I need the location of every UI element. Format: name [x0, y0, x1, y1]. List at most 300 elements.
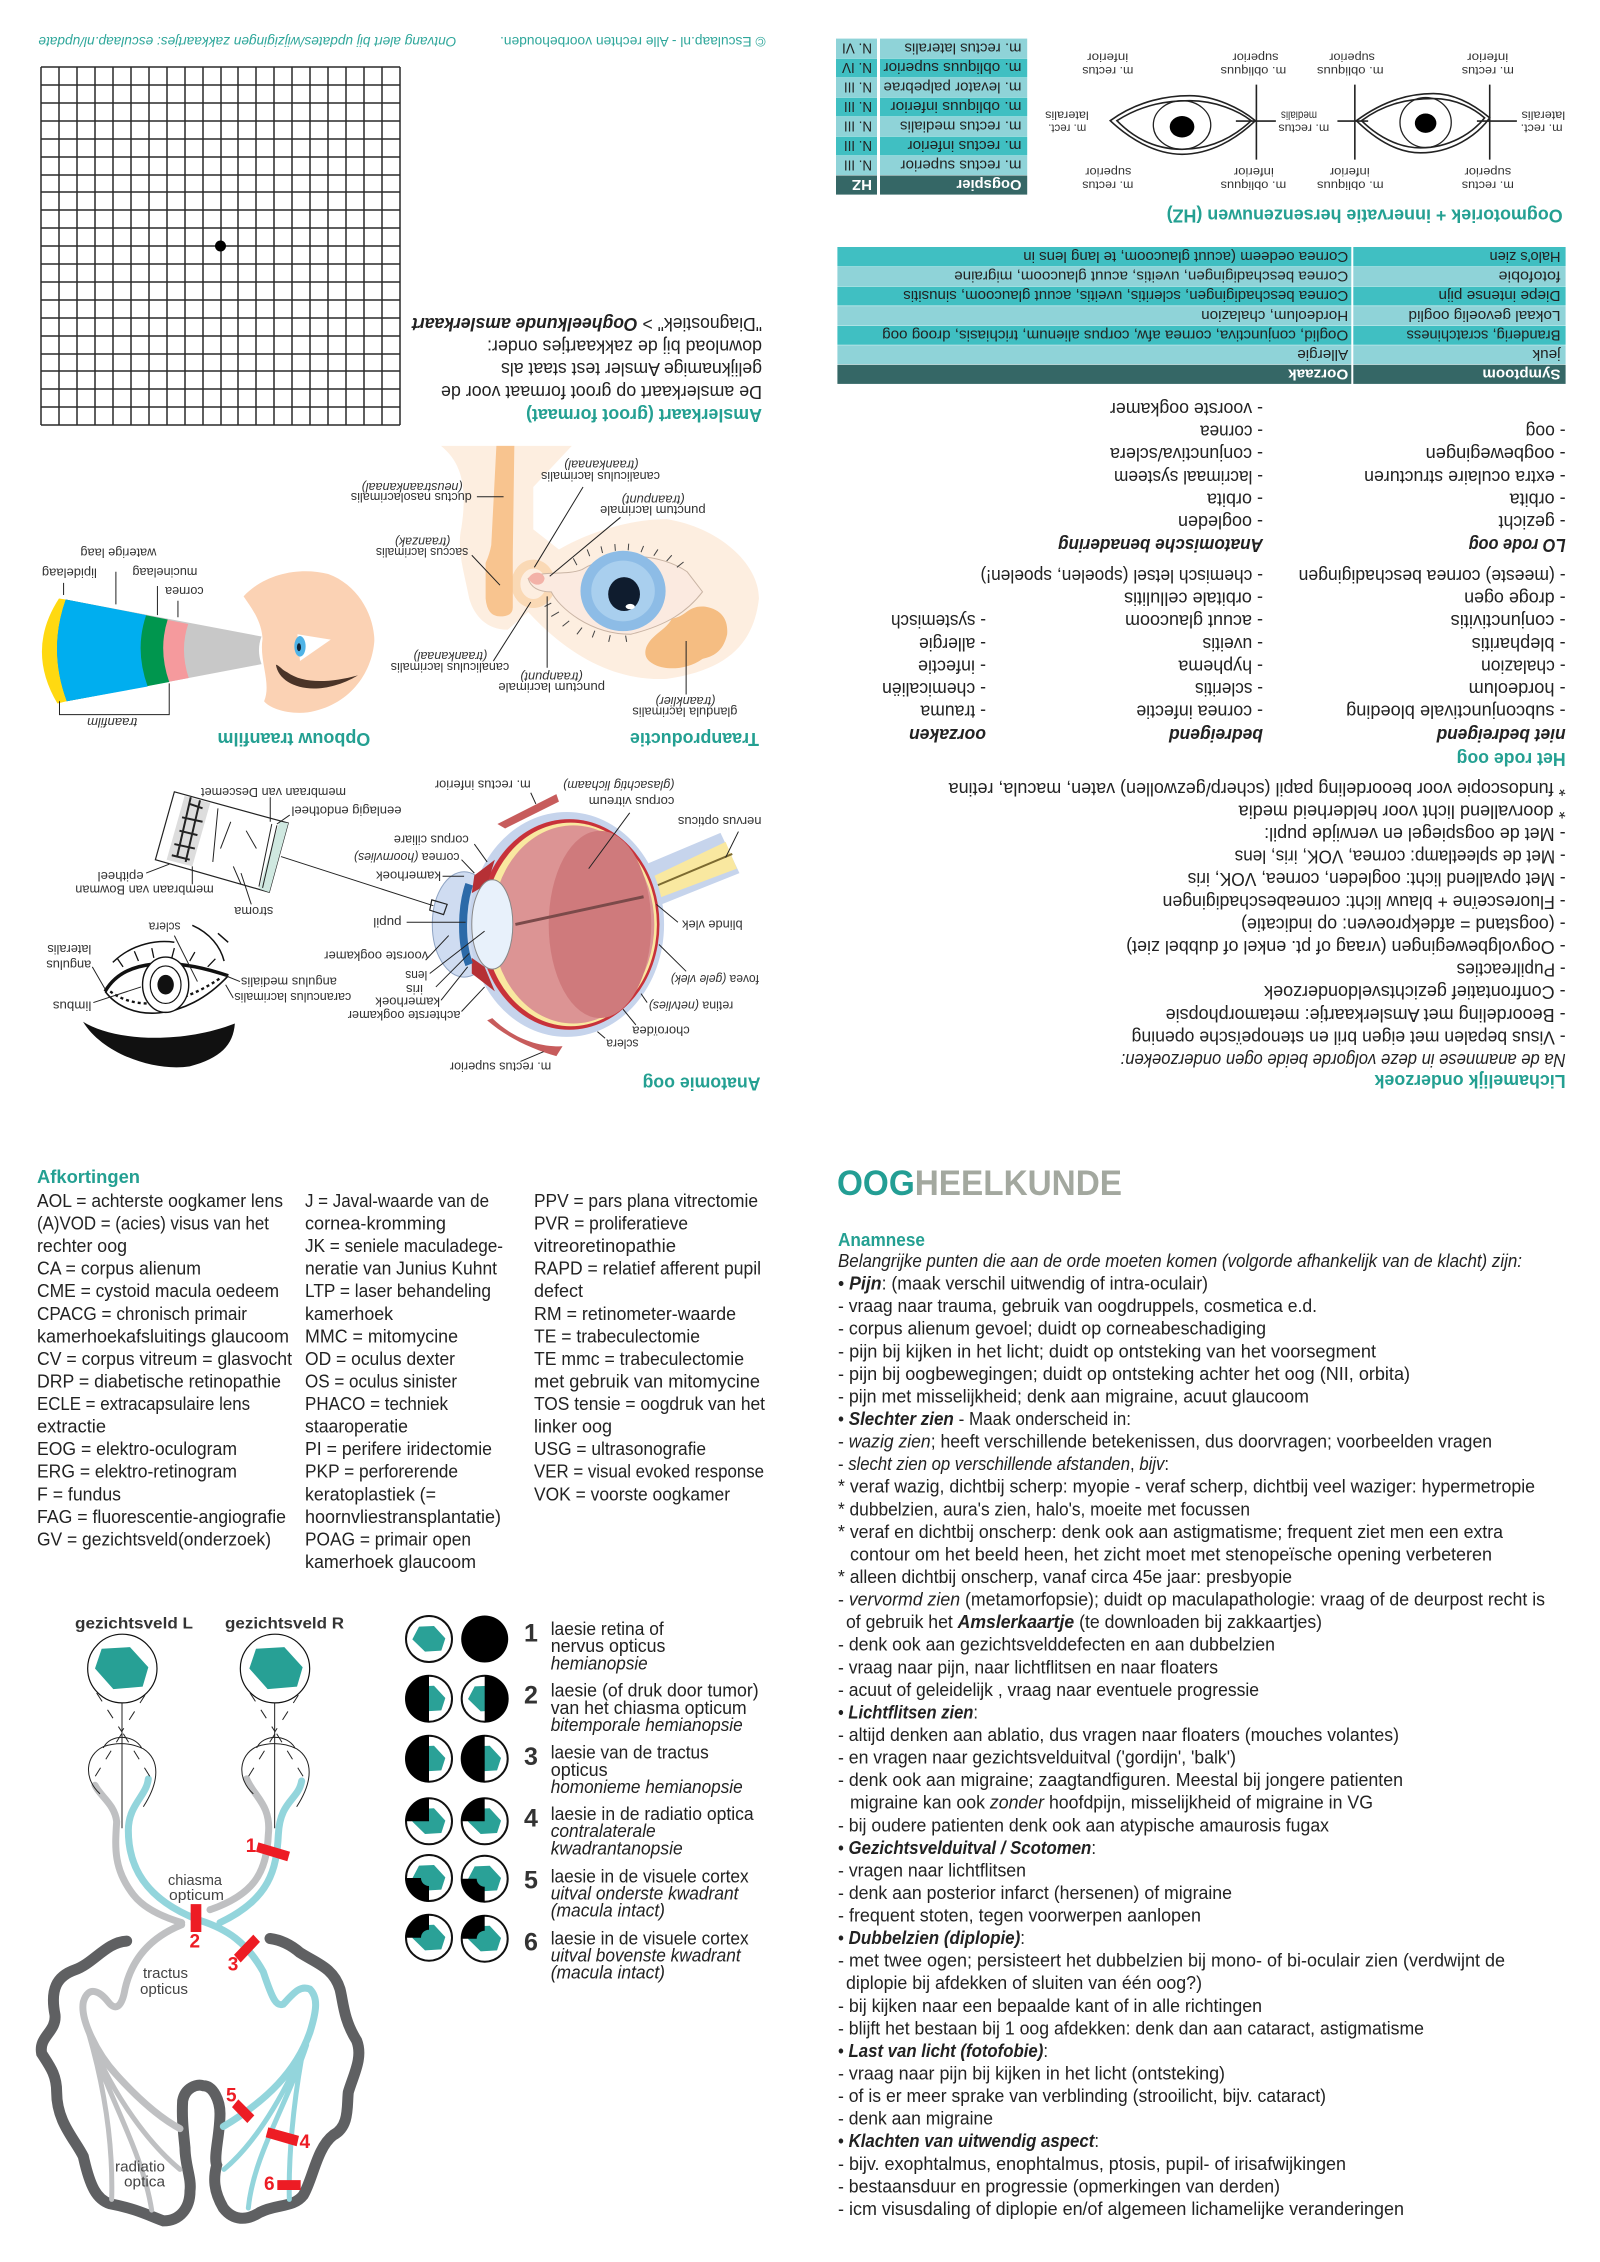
table: oogspier / HZ: HZ: [852, 176, 872, 193]
row 6: 6: [524, 1929, 538, 1957]
abbreviations column 2: neratie van Junius Kuhnt: [305, 1259, 497, 1279]
table: symptoom / oorzaak: Branderig, scratchiness: [1406, 326, 1560, 343]
abbreviations column 1: GV = gezichtsveld(onderzoek): [37, 1529, 271, 1549]
abbreviations column 3: vitreoretinopathie: [534, 1236, 676, 1256]
examination list: - Beoordeling met Amslerkaartje: metamorphopsie: [1166, 1005, 1566, 1025]
tear duct labels: (neustraankanaal): [362, 480, 463, 495]
examination list: - (oogstand = afdekproeven: op indicatie): [1241, 914, 1566, 934]
anamnese text: * alleen dichtbij onscherp, vanaf circa 45e jaar: presbyopie: [838, 1567, 1292, 1587]
list: bedreigend: - orbitale cellulitis: [1124, 589, 1263, 609]
row 1: hemianopsie: [551, 1653, 648, 1673]
eyeball labels: fovea (gele vlek): [671, 972, 759, 987]
abbreviations column 2: OD = oculus dexter: [305, 1349, 455, 1369]
abbreviations column 1: rechter oog: [37, 1236, 127, 1256]
abbreviations column 2: PHACO = techniek: [305, 1394, 449, 1414]
eye sketch illustration: [83, 925, 240, 1067]
heading: Anatomie oog: Anatomie oog: [642, 1074, 760, 1094]
list: niet bedreigend: - blepharitis: [1472, 634, 1566, 654]
eye sketch labels: caranculus lacrimalis: [234, 990, 351, 1005]
eye muscle labels: superior: [1329, 51, 1375, 65]
tear duct labels: (traankanaal): [413, 649, 487, 664]
abbreviations column 1: FAG = fluorescentie-angiografie: [37, 1507, 286, 1527]
list: Anatomische benadering: [1058, 399, 1264, 555]
eye muscle labels: m. rect.: [1521, 121, 1563, 135]
eye sketch labels: limbus: [52, 998, 91, 1013]
row 4: kwadrantanopsie: [551, 1838, 683, 1858]
visual pathway drawing: [41, 1634, 359, 2221]
table: oogspier / HZ: m. rectus inferior: [908, 137, 1022, 154]
physical examination: [948, 779, 1566, 1092]
anamnese text: - vervormd zien (metamorfopsie); duidt op maculapathologie: vraag of de deurpost recht is: [838, 1590, 1545, 1610]
anamnese text: - slecht zien op verschillende afstanden, bijv:: [838, 1454, 1169, 1474]
heading: Oogmotoriek + innervatie hersenzenuwen: Oogmotoriek + innervatie hersenzenuwen (HZ): [1167, 206, 1563, 227]
anamnese text: - vraag naar trauma, gebruik van oogdruppels, cosmetica e.d.: [838, 1296, 1317, 1316]
examination list: * fundoscopie voor beoordeling papil (scherp/gezwollen) vaten, macula, retina: [948, 779, 1566, 799]
amsler description: gelijknamige Amsler test staat als: [501, 359, 762, 379]
abbreviations column 3: USG = ultrasonografie: [534, 1439, 706, 1459]
list: Anatomische benadering: - cornea: [1199, 422, 1263, 442]
row 2: 2: [524, 1682, 538, 1710]
tear duct labels: (traanpunt): [622, 492, 685, 508]
list: niet bedreigend: - conjunctivitis: [1451, 611, 1566, 631]
anamnese text: Belangrijke punten die aan de orde moeten komen (volgorde afhankelijk van de klacht) zijn:: [838, 1251, 1522, 1271]
table: oogspier / HZ: m. rectus lateralis: [904, 40, 1022, 57]
lesion site numbers: 2: [190, 1932, 200, 1952]
table: oogspier / HZ: m. rectus medialis: [900, 118, 1022, 135]
lesion site numbers: 3: [228, 1955, 238, 1976]
label: radiatio optica: optica: [124, 2174, 166, 2191]
anamnese text: - pijn met misselijkheid; denk aan migraine, acuut glaucoom: [838, 1386, 1309, 1406]
examination list: * doorvallend licht voor helderheid media: [1238, 801, 1566, 821]
table: symptoom / oorzaak: Symptoom: [1482, 366, 1560, 382]
tear duct labels: glandula lacrimalis: [632, 704, 737, 720]
abbreviations column 2: J = Javal-waarde van de: [305, 1191, 489, 1211]
amsler heading: Amslerkaart (groot formaat): [526, 405, 762, 426]
cornea section labels: membraan van Descemet: [201, 785, 346, 800]
abbreviations column 1: ECLE = extracapsulaire lens: [37, 1394, 250, 1414]
eyeball labels: blinde vlek: [682, 918, 743, 932]
abbreviations column 1: CA = corpus alienum: [37, 1259, 201, 1279]
list: bedreigend: - hyphema: [1177, 656, 1263, 676]
eyeball labels: iris: [405, 982, 423, 997]
amsler text block: [411, 314, 762, 426]
tear duct labels: (traankanaal): [564, 458, 638, 473]
heading: gezichtsveld L: gezichtsveld L: [75, 1616, 193, 1633]
panel: top half shapes (amsler grid): [41, 67, 1517, 1067]
abbreviations column 3: TOS tensie = oogdruk van het: [534, 1394, 765, 1414]
eye sketch labels: sclera: [148, 920, 180, 935]
eyeball labels: sclera: [605, 1037, 638, 1052]
row 3: opticus: [551, 1760, 608, 1780]
abbreviations column 2: [305, 1191, 503, 1572]
anamnese text: - en vragen naar gezichtsvelduitval ('gordijn', 'balk'): [838, 1748, 1236, 1768]
table: symptoom / oorzaak: Hordeolum, chalazion: [1201, 307, 1348, 324]
row 6: (macula intact): [551, 1963, 665, 1983]
anamnese text: - bij oudere patienten denk ook aan atypische amaurosis fugax: [838, 1815, 1329, 1835]
anamnese text: - vraag naar pijn bij kijken in het licht (ontsteking): [838, 2064, 1225, 2084]
abbreviations column 2: keratoplastiek (=: [305, 1484, 436, 1504]
list: oorzaken: - systemisch: [891, 611, 986, 631]
row 4: [405, 1798, 755, 1858]
anamnese text: * veraf wazig, dichtbij scherp: myopie - veraf scherp, dichtbij veel waziger: hypermetropie: [838, 1477, 1535, 1497]
tear duct labels: canaliculus lacrimalis: [390, 660, 509, 675]
eye sketch labels: angulus medialis: [240, 975, 337, 990]
abbreviations column 2: cornea-kromming: [305, 1214, 446, 1234]
list: LO rode oog: - oog: [1526, 422, 1566, 442]
anamnese text: - pijn bij kijken in het licht; duidt op ontsteking van het voorsegment: [838, 1341, 1376, 1361]
eye muscle labels: m. rectus: [1462, 64, 1514, 78]
row 4: 4: [524, 1805, 538, 1833]
table: oogspier / HZ: N. VI: [842, 40, 872, 57]
cornea section labels: membraan van Bowman: [75, 883, 214, 898]
tear duct labels: ductus nasolacrimalis: [350, 490, 472, 505]
anamnese text: - denk ook aan gezichtsvelddefecten en aan dubbelzien: [838, 1635, 1275, 1655]
eye muscle labels: superior: [1085, 165, 1131, 179]
list: Anatomische benadering: - voorste oogkamer: [1110, 399, 1263, 419]
abbreviations column 1: (A)VOD = (acies) visus van het: [37, 1214, 269, 1234]
label: radiatio optica: radiatio: [115, 2158, 165, 2176]
table: symptoom / oorzaak: Cornea beschadigingen, scleritis, uveitis, acuut glaucoom, sinusitis: [903, 287, 1348, 304]
table: symptoom / oorzaak: Cornea beschadigingen, uveitis, acuut glaucoom, migraine: [954, 268, 1348, 285]
eye muscle labels: lateralis: [1522, 108, 1565, 122]
list: Anatomische benadering: - conjunctiva/sclera: [1109, 444, 1263, 464]
eye muscle labels: inferior: [1467, 51, 1508, 65]
row 6: uitval bovenste kwadrant: [551, 1946, 742, 1966]
lesion site numbers: 1: [246, 1836, 257, 1857]
tear duct labels: punctum lacrimale: [498, 680, 605, 695]
tear production illustration: [441, 446, 759, 695]
table: symptoom / oorzaak: Oorzaak: [1288, 366, 1348, 382]
amsler grid: [41, 67, 400, 425]
lesion site numbers: [190, 1836, 310, 2195]
abbreviations column 2: hoornvliestransplantatie): [305, 1507, 501, 1527]
list: bedreigend: - cornea infectie: [1136, 702, 1263, 722]
label: tractus opticus: [140, 1965, 188, 1998]
table: oogspier / HZ: N. III: [844, 157, 872, 174]
abbreviations column 2: JK = seniele maculadege-: [305, 1236, 503, 1256]
abbreviations column 3: linker oog: [534, 1417, 612, 1437]
panel: visual pathway diagram: [41, 1616, 359, 2221]
anamnese text: • Last van licht (fotofobie):: [838, 2041, 1048, 2061]
eyeball labels: nervus opticus: [677, 814, 762, 829]
label: tractus opticus: opticus: [140, 1981, 188, 1998]
heading: Afkortingen: Afkortingen: [37, 1166, 140, 1187]
list: bedreigend: - uveitis: [1202, 634, 1263, 654]
eye diagrams (oogmotoriek): [1110, 85, 1517, 160]
anamnese text: - acuut of geleidelijk , vraag naar eventuele progressie: [838, 1680, 1259, 1700]
list: oorzaken: [882, 611, 986, 745]
row 1: nervus opticus: [551, 1636, 665, 1656]
amsler description: De amslerkaart op groot formaat voor de: [441, 382, 762, 402]
table: symptoom / oorzaak: jeuk: [1532, 346, 1562, 363]
list: LO rode oog: LO rode oog: [1469, 535, 1566, 555]
footer update link: Ontvang alert bij updates/wijzigingen zakkaartjes: esculaap.nl/update: [38, 34, 456, 50]
table: oogspier / HZ: Oogspier: [956, 176, 1022, 193]
abbreviations column 3: TE mmc = trabeculectomie: [534, 1349, 744, 1369]
eye muscle labels: inferior: [1234, 165, 1274, 179]
table: oogspier / HZ: m. obliquus inferior: [890, 98, 1022, 115]
abbreviations column 1: extractie: [37, 1417, 106, 1437]
tear duct labels: punctum lacrimale: [600, 503, 706, 518]
cornea section labels: epitheel: [97, 869, 144, 884]
anamnese text: - vragen naar lichtflitsen: [838, 1860, 1026, 1880]
eye muscle labels: m. rectus: [1082, 178, 1133, 192]
eye muscle labels: m. obliquus: [1221, 178, 1286, 192]
heading: gezichtsveld R: gezichtsveld R: [225, 1616, 344, 1633]
anamnese text: - bij kijken naar een bepaalde kant of in alle richtingen: [838, 1996, 1262, 2016]
row 1: laesie retina of: [551, 1619, 665, 1639]
abbreviations column 1: DRP = diabetische retinopathie: [37, 1372, 281, 1392]
list: LO rode oog: - gezicht: [1499, 512, 1566, 532]
table: oogspier / HZ: m. levator palpebrae: [884, 79, 1022, 96]
table: symptoom / oorzaak: Halo's zien: [1490, 248, 1560, 265]
list: bedreigend: - acuut glaucoom: [1125, 611, 1263, 631]
eyeball labels: m. rectus superior: [449, 1059, 551, 1074]
list: bedreigend: - scleritis: [1195, 679, 1263, 699]
eye muscle labels: m. obliquus: [1317, 178, 1384, 192]
abbreviations column 2: kamerhoek: [305, 1304, 394, 1324]
amsler description: [411, 314, 762, 402]
anamnese text: - wazig zien; heeft verschillende betekenissen, dus doorvragen; voorbeelden vragen: [838, 1432, 1492, 1452]
abbreviations column 3: TE = trabeculectomie: [534, 1326, 700, 1346]
list: Anatomische benadering: Anatomische benadering: [1058, 535, 1264, 555]
cornea section labels: eenlagig endotheel: [291, 804, 402, 819]
amsler description: download bij de zakkaartjes onder:: [487, 336, 762, 356]
list: oorzaken: - trauma: [919, 702, 986, 722]
eye sketch labels: [46, 920, 351, 1013]
abbreviations column 2: OS = oculus sinister: [305, 1372, 457, 1392]
anamnese text: * veraf en dichtbij onscherp: denk ook aan astigmatisme; frequent ziet men een extra: [838, 1522, 1504, 1542]
row 5: (macula intact): [551, 1901, 665, 1921]
table: symptoom / oorzaak: Allergie: [1297, 346, 1348, 363]
row 3: 3: [524, 1743, 538, 1771]
row 3: [405, 1735, 743, 1797]
examination list: [948, 779, 1566, 1070]
list: Anatomische benadering: - orbita: [1206, 489, 1263, 509]
tear film layer labels: traanfilm: [87, 715, 137, 730]
table: oogspier / HZ: N. III: [844, 98, 872, 115]
anamnese text: [838, 1251, 1545, 2219]
row 6: [405, 1914, 749, 1983]
label: radiatio optica: [115, 2158, 166, 2191]
anamnese text: • Pijn: (maak verschil uitwendig of intra-oculair): [838, 1274, 1208, 1294]
eye muscle labels: m. rectus: [1462, 178, 1514, 192]
table: oogspier / HZ: m. rectus superior: [900, 157, 1022, 174]
abbreviations column 1: AOL = achterste oogkamer lens: [37, 1191, 283, 1211]
abbreviations column 2: POAG = primair open: [305, 1529, 471, 1549]
row 4: contralaterale: [551, 1821, 656, 1841]
anamnese text: • Lichtflitsen zien:: [838, 1702, 978, 1722]
anamnese text: • Klachten van uitwendig aspect:: [838, 2131, 1099, 2151]
abbreviations column 2: PI = perifere iridectomie: [305, 1439, 492, 1459]
list: niet bedreigend: - (meeste) cornea beschadigingen: [1299, 566, 1566, 586]
eyeball labels: corpus ciliare: [394, 833, 469, 848]
eye muscle labels: m. obliquus: [1221, 64, 1286, 78]
eyeball labels: voorste oogkamer: [324, 949, 428, 964]
eyeball labels: retina (netvlies): [649, 998, 733, 1013]
row 3: homonieme hemianopsie: [551, 1777, 743, 1797]
tear duct labels: (traanklier): [655, 694, 715, 709]
list: niet bedreigend: [1299, 566, 1566, 745]
table: oogspier / HZ: N. III: [844, 118, 872, 135]
anatomy eyeball illustration: [281, 793, 739, 1061]
row 1: [406, 1616, 665, 1673]
tear duct labels: (traanzak): [395, 534, 450, 549]
anamnese text: - of is er meer sprake van verblinding (strooilicht, bijv. cataract): [838, 2086, 1326, 2106]
anamnese text: - bestaansduur en progressie (opmerkingen van derden): [838, 2176, 1280, 2196]
eye muscle labels: m. rectus: [1082, 64, 1133, 78]
row 5: uitval onderste kwadrant: [551, 1884, 739, 1904]
anamnese text: • Gezichtsvelduitval / Scotomen:: [838, 1838, 1096, 1858]
abbreviations column 1: EOG = elektro-oculogram: [37, 1439, 237, 1459]
list: bedreigend: bedreigend: [1168, 725, 1263, 745]
eyeball labels: corpus vitreum: [589, 794, 674, 809]
tear duct labels: canaliculus lacrimalis: [541, 469, 660, 484]
amsler description: "Diagnostiek" > Oogheelkunde amslerkaart: [411, 314, 762, 334]
examination list: - Met opvallend licht: oogleden, cornea, VOK, iris: [1188, 869, 1566, 889]
eye muscle labels: m. rect.: [1048, 121, 1086, 135]
table: oogspier / HZ: [836, 39, 1027, 195]
row 1: 1: [524, 1620, 538, 1648]
eyeball labels: m. rectus inferior: [434, 777, 531, 792]
cornea cross-section illustration: [146, 792, 290, 904]
abbreviations column 1: ERG = elektro-retinogram: [37, 1462, 237, 1482]
tear duct labels: (traanpunt): [520, 670, 583, 685]
label: chiasma opticum: [168, 1872, 224, 1904]
table: oogspier / HZ: m. obliquus superior: [884, 59, 1022, 76]
examination list: - Confrontatief gezichtsveldonderzoek: [1263, 982, 1566, 1002]
anamnese text: • Slechter zien - Maak onderscheid in:: [838, 1409, 1131, 1429]
examination list: Na de anamnese in deze volgorde beide ogen onderzoeken:: [1121, 1050, 1566, 1070]
anamnese text: • Dubbelzien (diplopie):: [838, 1928, 1025, 1948]
abbreviations column 1: CV = corpus vitreum = glasvocht: [37, 1349, 292, 1369]
table: symptoom / oorzaak: Ooglid, conjunctiva, cornea afw, corpus alienum, trichiasis, droog oog: [882, 326, 1348, 343]
eye muscle labels: superior: [1464, 165, 1511, 179]
row 2: laesie (of druk door tumor): [551, 1681, 759, 1701]
examination list: - Met de spleetlamp: cornea, VOK, iris, lens: [1235, 847, 1566, 867]
anamnese text: - bijv. exophtalmus, enophtalmus, ptosis, pupil- of irisafwijkingen: [838, 2154, 1346, 2174]
examination list: - Visus bepalen met eigen bril en stenopeïsche opening: [1132, 1027, 1566, 1047]
list: niet bedreigend: niet bedreigend: [1436, 725, 1566, 745]
eye muscle labels: inferior: [1087, 51, 1128, 65]
abbreviations column 2: kamerhoek glaucoom: [305, 1552, 476, 1572]
eye muscle labels: m. obliquus: [1317, 64, 1384, 78]
anamnese text: - icm visusdaling of diplopie en/of algemeen lichamelijke veranderingen: [838, 2199, 1404, 2219]
abbreviations column 3: [534, 1191, 765, 1504]
eyeball labels: pupil: [373, 915, 402, 930]
row 2: [405, 1675, 759, 1735]
anamnese text: of gebruik het Amslerkaartje (te downloaden bij zakkaartjes): [846, 1612, 1322, 1632]
abbreviations column 1: CME = cystoid macula oedeem: [37, 1281, 279, 1301]
eye muscle labels: lateralis: [1045, 108, 1089, 122]
eyeball labels: kamerhoek: [375, 868, 441, 883]
list: niet bedreigend: - hordeolum: [1469, 679, 1566, 699]
abbreviations column 3: defect: [534, 1281, 583, 1301]
anamnese text: contour om het beeld heen, het zicht moet met stenopeïsche opening verbeteren: [850, 1544, 1492, 1564]
eye muscle labels: superior: [1232, 51, 1278, 65]
row 2: bitemporale hemianopsie: [551, 1715, 743, 1735]
abbreviations column 2: MMC = mitomycine: [305, 1326, 458, 1346]
eyeball labels: (glasachtig lichaam): [563, 778, 674, 793]
abbreviations column 3: RM = retinometer-waarde: [534, 1304, 736, 1324]
table: oogspier / HZ: N. III: [844, 79, 872, 96]
heading: Lichamelijk onderzoek: Lichamelijk onderzoek: [1374, 1071, 1566, 1092]
row 2: van het chiasma opticum: [551, 1698, 747, 1718]
eyeball labels: lens: [405, 968, 427, 983]
lesion site numbers: 5: [226, 2086, 237, 2107]
eye sketch labels: lateralis: [47, 942, 91, 957]
panel: visual field defects legend: [405, 1616, 759, 1983]
eye muscle labels: inferior: [1330, 165, 1370, 179]
abbreviations column 1: F = fundus: [37, 1484, 121, 1504]
list: LO rode oog: - oogbewegingen: [1426, 444, 1566, 464]
examination list: - Fluoresceïne + blauw licht: corneabeschadigingen: [1163, 892, 1566, 912]
list: bedreigend: - chemisch letsel (spoelen, spoelen!): [980, 566, 1263, 586]
tear duct labels: saccus lacrimalis: [375, 545, 468, 560]
abbreviations column 2: PKP = perforerende: [305, 1462, 458, 1482]
anamnese text: - corpus alienum gevoel; duidt op corneabeschadiging: [838, 1319, 1266, 1339]
abbreviations column 3: PPV = pars plana vitrectomie: [534, 1191, 758, 1211]
anamnese text: - pijn bij oogbewegingen; duidt op ontsteking achter het oog (NII, orbita): [838, 1364, 1410, 1384]
table: symptoom / oorzaak: Cornea oedeem (acuut glaucoom, te lang lens in: [1023, 248, 1348, 265]
panel: top half tables and text, page printed upside down: [38, 34, 1566, 1094]
abbreviations column 1: CPACG = chronisch primair: [37, 1304, 247, 1324]
anamnese text: - blijft het bestaan bij 1 oog afdekken: denk dan aan cataract, astigmatisme: [838, 2018, 1424, 2038]
heading: Opbouw traanfilm: Opbouw traanfilm: [218, 729, 370, 750]
anamnese text: - vraag naar pijn, naar lichtflitsen en naar floaters: [838, 1657, 1218, 1677]
eye sketch labels: angulus: [46, 958, 91, 973]
label: tractus opticus: tractus: [143, 1965, 188, 1982]
panel: abbreviations: [37, 1166, 765, 1572]
panel: anamnese: [838, 1229, 1545, 2219]
tear film layer labels: cornea: [164, 584, 204, 599]
abbreviations column 2: staaroperatie: [305, 1417, 408, 1437]
anamnese text: migraine kan ook zonder hoofdpijn, misselijkheid of migraine in VG: [850, 1793, 1373, 1813]
anamnese text: - denk aan migraine: [838, 2109, 993, 2129]
table: oogspier / HZ: N. IV: [842, 59, 872, 76]
lesion site numbers: 6: [264, 2174, 275, 2195]
table: symptoom / oorzaak: Diepe intense pijn: [1438, 287, 1560, 304]
examination list: - Pupilreacties: [1457, 960, 1566, 980]
anamnese text: - denk ook aan migraine; zaagtandfiguren. Meestal bij jongere patienten: [838, 1770, 1403, 1790]
eye muscle labels: [1045, 51, 1565, 192]
row 6: laesie in de visuele cortex: [551, 1928, 749, 1948]
anamnese text: * dubbelzien, aura's zien, halo's, moeite met focussen: [838, 1499, 1250, 1519]
table: symptoom / oorzaak: Lokaal gevoelig ooglid: [1408, 307, 1560, 324]
red eye section: [882, 399, 1566, 770]
list: oorzaken: - allergie: [919, 634, 986, 654]
examination list: - Met de oogspiegel en verwijde pupil:: [1264, 824, 1566, 844]
row 3: laesie van de tractus: [551, 1743, 709, 1763]
eyeball labels: [324, 777, 762, 1074]
row 4: laesie in de radiatio optica: [551, 1804, 755, 1824]
abbreviations column 3: RAPD = relatief afferent pupil: [534, 1259, 761, 1279]
list: oorzaken: - chemicaliën: [882, 679, 986, 699]
tear film layer labels: waterige laag: [80, 546, 157, 561]
tear film layer labels: lipidelaag: [42, 566, 97, 581]
label: chiasma opticum: opticum: [169, 1887, 224, 1904]
tear film labels: [42, 546, 370, 750]
tear production labels: [350, 458, 759, 750]
cornea section labels: stroma: [234, 904, 273, 919]
abbreviations column 3: met gebruik van mitomycine: [534, 1372, 760, 1392]
cornea section labels: [75, 785, 402, 919]
heading: Traanproductie: Traanproductie: [630, 729, 759, 750]
eye muscle labels: medialis: [1281, 108, 1317, 122]
list: oorzaken: - infectie: [918, 656, 986, 676]
abbreviations column 1: [37, 1191, 292, 1549]
list: LO rode oog: [1364, 422, 1566, 555]
